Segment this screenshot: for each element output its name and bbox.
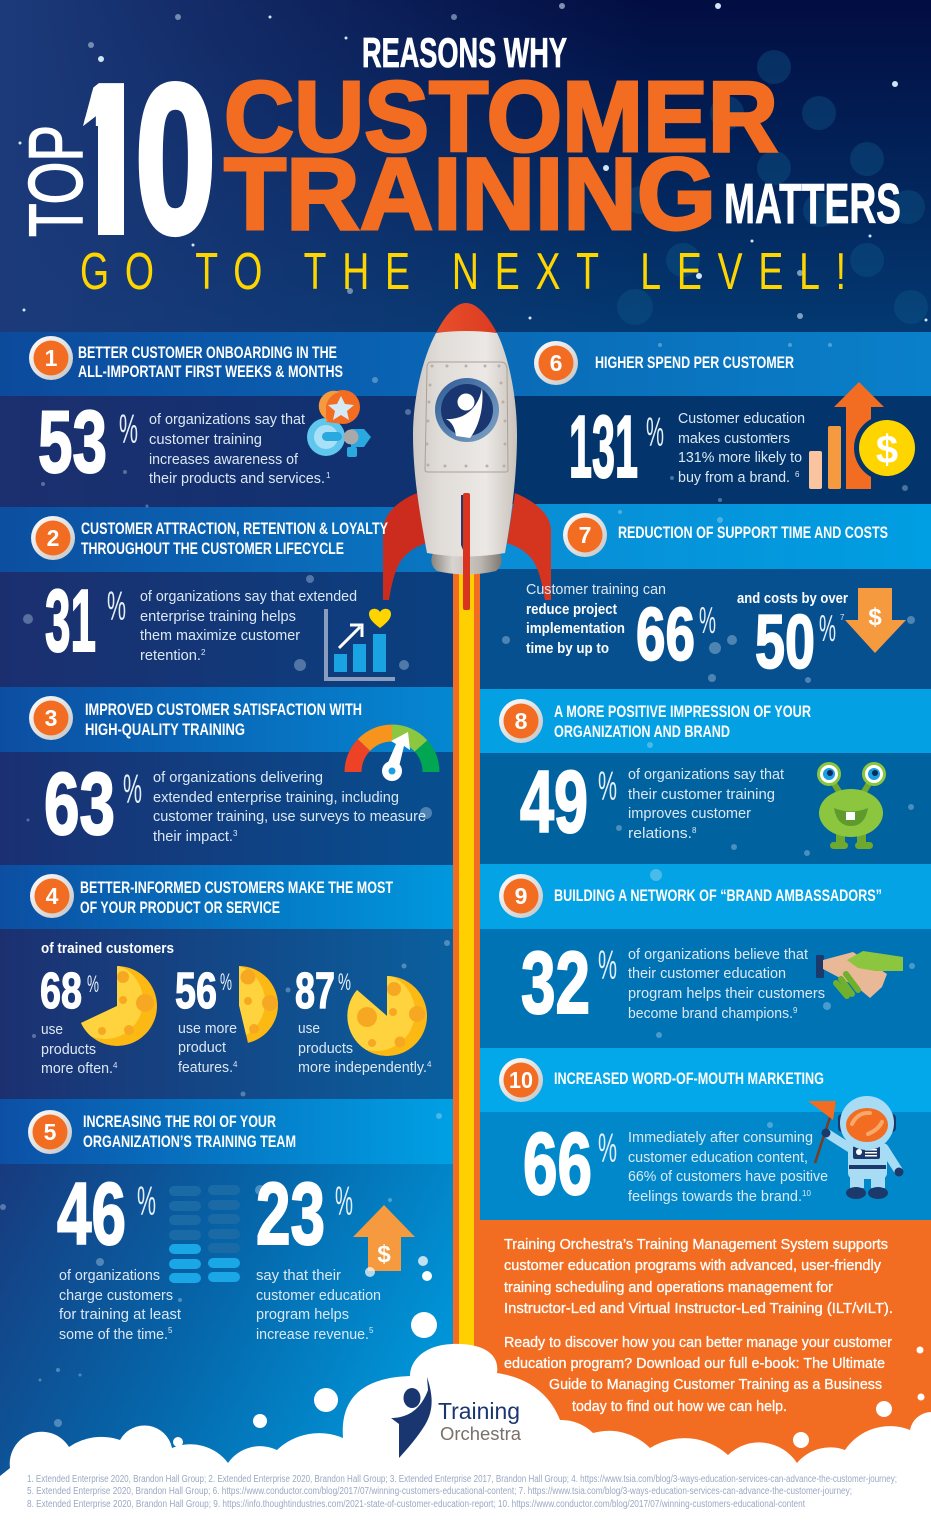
text 10: 10 [802,1189,811,1198]
badge 6: 6 [550,350,562,376]
text: about the TMS: customer education programs with advanced, user-friendly [504,1258,882,1274]
heading 8: ORGANIZATION AND BRAND [554,722,730,741]
stat 49%: % [598,763,617,809]
text 23 [256,1268,381,1343]
icon: megaphone [307,390,371,457]
cheese pie 87 [347,976,427,1056]
panel 3 [29,696,431,853]
title [14,29,901,300]
stat 32%: % [598,942,617,988]
heading 1: BETTER CUSTOMER ONBOARDING IN THE [78,343,337,362]
heading 3 [85,700,362,739]
stat 56%: 56 [175,962,217,1019]
stat 66%: 66 [636,592,695,676]
text 3: their impact. [153,829,233,845]
panel 5: % [335,1178,353,1224]
text 8: 8 [692,826,697,835]
text 6 [678,411,805,486]
stat 53%: % [119,406,138,452]
text 1: 1 [326,471,331,480]
text 3: customer training, use surveys to measure [153,809,426,825]
badge 4: 4 [46,883,59,909]
heading 2: CUSTOMER ATTRACTION, RETENTION & LOYALTY [81,519,388,538]
10 [83,81,212,238]
body plate with rivets [425,362,508,472]
badge 7: 7 [579,522,591,548]
icon: astronaut with flag [808,1096,904,1199]
orange call-to-action panel [480,1220,931,1482]
heading 6: HIGHER SPEND PER CUSTOMER [595,353,794,372]
text 7a: time by up to [526,641,609,657]
badge 2 [31,516,75,560]
heading 1: ALL-IMPORTANT FIRST WEEKS & MONTHS [78,362,343,381]
icon: growth arrow and coin [809,382,920,489]
heading 4: OF YOUR PRODUCT OR SERVICE [80,898,280,917]
10: 1 [58,40,154,277]
text 10 [628,1130,828,1205]
text 87: more independently. [298,1060,427,1076]
heading 5 [83,1112,296,1151]
text 9: of organizations believe that [628,947,808,963]
stat 46%: 46 [57,1164,126,1263]
badge 8: 8 [515,708,528,734]
text 9: program helps their customers [628,986,825,1002]
text 9: their customer education [628,966,786,982]
icon: growth arrow and coin: $ [876,428,898,472]
stat 31%: 31 [45,571,96,670]
text 56: use more [178,1021,237,1037]
icon: bar chart with heart [326,609,395,679]
text 8: relations. [628,826,692,842]
panel 2 [31,516,395,679]
cheese pie 56 [239,966,278,1043]
stat 131%: 131 [569,397,638,496]
footnotes [27,1474,897,1510]
text 9: become brand champions. [628,1006,793,1022]
icon: down arrow dollar [845,588,906,653]
bubbles [173,1346,924,1448]
bubbles [365,1256,437,1338]
text: call to action: Guide to Managing Customer Training as a Business [549,1377,882,1393]
text 3: extended enterprise training, including [153,790,399,806]
text 68: products [41,1042,96,1058]
text 2: of organizations say that extended [140,589,357,605]
text 2: enterprise training helps [140,609,296,625]
stat 131% [569,397,664,496]
text 68 [41,1022,118,1077]
text 23: 5 [369,1326,374,1335]
panel 5 [28,1110,437,1343]
right fin [507,493,551,600]
stat 46%: % [137,1178,156,1224]
reasons why: REASONS WHY [362,29,567,76]
panel 8 [499,699,886,851]
text: call to action: education program? Download our full e-book: The Ultimate [504,1356,885,1372]
text: about the TMS: Instructor-Led and Virtual Instructor-Led Training (ILT/vILT). [504,1301,893,1317]
icon: handshake [816,951,903,998]
text 87: use [298,1021,320,1037]
text 56: 4 [233,1060,238,1069]
rocket [383,303,551,610]
cheese pie 68 [81,966,157,1046]
text 68: more often. [41,1061,113,1077]
stat 66%: % [598,1125,617,1171]
badge 1 [29,336,73,380]
text 3: of organizations delivering [153,770,323,786]
icon: green alien [817,762,886,849]
text 6: 6 [795,470,800,479]
heading 3: IMPROVED CUSTOMER SATISFACTION WITH [85,700,362,719]
stat 68%: 68 [40,962,82,1019]
heading 8: A MORE POSITIVE IMPRESSION OF YOUR [554,702,811,721]
stat 32%: 32 [521,933,590,1032]
text 8 [628,767,784,842]
stat 63%: 63 [44,754,115,853]
text: call to action [504,1335,892,1415]
text 56: features. [178,1060,233,1076]
text 10: 66% of customers have positive [628,1169,828,1185]
customer: CUSTOMER [224,61,778,173]
text 56 [178,1021,238,1076]
badge 5: 5 [44,1119,57,1145]
text 6: makes customers [678,431,790,447]
text 46 [59,1268,181,1343]
text 9 [628,947,825,1022]
left fin [383,493,426,600]
heading 3: HIGH-QUALITY TRAINING [85,720,245,739]
icon: up arrow dollar [353,1205,415,1271]
panel 10 [499,1058,904,1213]
panel 7 [526,513,906,685]
text 9: 9 [793,1006,798,1015]
stat 87%: % [338,969,351,996]
text 46: 5 [168,1326,173,1335]
badge 9 [499,874,543,918]
text 2 [140,589,357,664]
panel 6: % [646,409,664,455]
text 1: customer training [149,432,262,448]
text 2: 2 [201,648,206,657]
text 7a: Customer training can [526,582,666,598]
rocket body [413,330,517,556]
subtitle: GO TO THE NEXT LEVEL! [80,242,846,300]
text 23: increase revenue. [256,1327,369,1343]
badge 10 [499,1058,543,1102]
logo: Training Orchestra: Training [438,1398,520,1424]
badge 9: 9 [515,883,527,909]
text 2: retention. [140,648,201,664]
text 10: Immediately after consuming [628,1130,813,1146]
badge 7 [563,513,607,557]
panel 6 [534,341,920,496]
text 87: products [298,1041,353,1057]
logo: Training Orchestra: Orchestra [440,1424,522,1444]
cloud footer [0,1344,931,1536]
text: call to action: today to find out how we can help. [572,1399,787,1415]
stat 31%: % [107,583,126,629]
stat 87%: 87 [295,962,335,1019]
nose cone [436,303,497,333]
text 7a: implementation [526,621,625,637]
text 7a: reduce project [526,602,617,618]
text: call to action: Ready to discover how you can better manage your customer [504,1335,892,1351]
badge 10: 10 [509,1067,533,1093]
text 7b: and costs by over [737,591,848,607]
heading 1 [78,343,343,381]
stat 53%: 53 [38,392,107,491]
10: 0 [135,40,216,277]
badge 4 [30,874,74,918]
space background [0,0,931,340]
text 2: them maximize customer [140,628,300,644]
heading 10: INCREASED WORD-OF-MOUTH MARKETING [554,1069,824,1088]
text 68: use [41,1022,63,1038]
porthole logo [435,378,499,442]
stat 56%: % [220,969,232,996]
text 23: customer education [256,1288,381,1304]
text 3 [153,770,426,845]
badge 1: 1 [45,345,58,371]
icon: down arrow dollar: $ [868,604,882,631]
training: TRAINING [224,137,716,251]
text 46: charge customers [59,1288,173,1304]
badge 3 [29,696,73,740]
stat 50%: 7 [840,613,845,622]
top: TOP [14,125,99,237]
stat 68%: % [87,971,99,998]
badge 6 [534,341,578,385]
panel 1 [29,336,371,491]
text: about the TMS [504,1237,893,1317]
text 68: 4 [113,1061,118,1070]
icon: gauge [353,732,431,781]
badge 8 [499,699,543,743]
stat 50%: 50 [755,600,815,685]
heading 4 [80,878,393,917]
text 23: say that their [256,1268,341,1284]
centre fin [461,493,470,610]
text 23: program helps [256,1307,349,1323]
text 8: of organizations say that [628,767,784,783]
text: about the TMS: training scheduling and operations management for [504,1280,833,1296]
text 8: improves customer [628,806,751,822]
heading 5: INCREASING THE ROI OF YOUR [83,1112,276,1131]
section bands and bodies [0,332,931,1484]
text 1: their products and services. [149,471,325,487]
heading 8 [554,702,811,741]
text 87 [298,1021,432,1076]
text 46: for training at least [59,1307,181,1323]
text 6: Customer education [678,411,805,427]
text 6: 131% more likely to [678,450,802,466]
stat 49%: 49 [520,752,588,851]
text 8: their customer training [628,787,775,803]
text 10: customer education content, [628,1150,808,1166]
text 56: product [178,1040,226,1056]
of trained customers: of trained customers [41,941,174,957]
text 1 [149,412,331,487]
panel 9 [499,874,903,1032]
icon: up arrow dollar: $ [377,1241,391,1268]
text 1: increases awareness of [149,452,299,468]
stat 66%: 66 [523,1114,592,1213]
heading 5: ORGANIZATION’S TRAINING TEAM [83,1132,296,1151]
logo: Training Orchestra [391,1377,522,1458]
badge 3: 3 [45,705,57,731]
text 6: buy from a brand. [678,470,790,486]
stat 23%: 23 [256,1164,325,1263]
rocket exhaust trail [453,570,480,1360]
text: about the TMS: Training Orchestra’s Training Management System supports [504,1237,888,1253]
badge 2: 2 [47,525,59,551]
text 7a [526,582,666,657]
text 46: some of the time. [59,1327,168,1343]
heading 4: BETTER-INFORMED CUSTOMERS MAKE THE MOST [80,878,393,897]
text 3: 3 [233,829,238,838]
nozzle [431,553,502,574]
text 87: 4 [427,1060,432,1069]
stat 66%: % [699,600,716,641]
panel 4 [30,874,432,1077]
stat 63%: % [123,766,142,812]
stat 50%: % [819,608,836,649]
pictogram stacks [169,1185,240,1283]
heading 2: THROUGHOUT THE CUSTOMER LIFECYCLE [81,539,344,558]
text 1: of organizations say that [149,412,305,428]
text 46: of organizations [59,1268,160,1284]
text 10: feelings towards the brand. [628,1189,802,1205]
heading 2 [81,519,388,558]
badge 5 [28,1110,72,1154]
